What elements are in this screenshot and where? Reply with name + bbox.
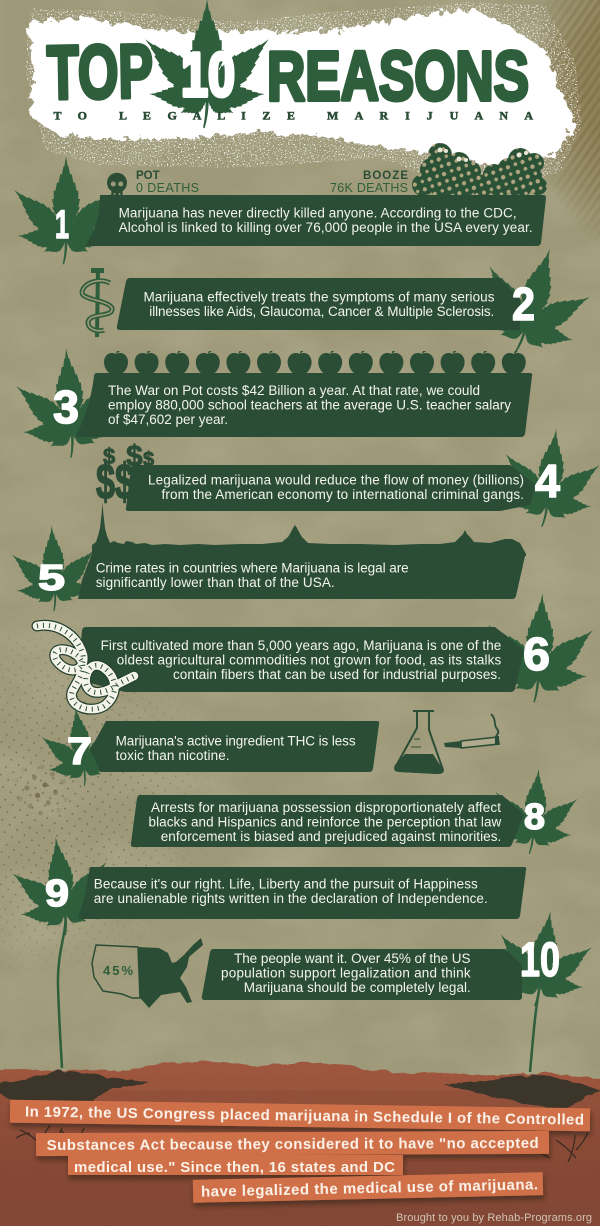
panel: reason 8 [131,765,586,859]
icon: flask [394,711,443,774]
icon: leaf 4 [490,422,600,534]
text 3 [108,383,511,427]
bar 4 [126,465,536,511]
panel: reason 1 [6,143,547,265]
title [46,0,533,128]
bar 2 [117,278,520,330]
strip 4: have legalized the medical use of marijuana. [201,1176,538,1201]
icon: dollar signs: $$ [96,454,134,510]
bar 6 [78,627,524,692]
booze deaths label: 76K DEATHS [330,181,408,195]
bar 1 [85,195,546,246]
text 2 [144,290,495,319]
icon: leaf 5 [4,523,103,614]
bar 3 [75,373,532,437]
text 10: population support legalization and think [221,966,471,980]
icon: leaf 9 [1,830,122,942]
text 4: Legalized marijuana would reduce the flow of money (billions) [148,472,524,488]
strip 2: Substances Act because they considered it to have "no accepted [47,1135,539,1154]
panel: reason 4 [96,422,600,534]
text 8: blacks and Hispanics and reinforce the perception that law [148,814,502,830]
icon: caduceus [82,268,112,337]
text 9: are unalienable rights written in the declaration of Independence. [94,891,488,906]
callout: Schedule I history [10,1100,590,1203]
number 7: 7 [67,731,92,773]
text 1: Marijuana has never directly killed anyone. According to the CDC, [119,206,517,220]
bar 8 [131,795,524,847]
strip 1: In 1972, the US Congress placed marijuana in Schedule I of the Controlled [25,1103,584,1129]
bar 5 [78,553,525,599]
text 4 [148,472,524,502]
subtitle: L E G A L I Z E [119,108,295,122]
plant roots and dark mounds [0,1071,600,1162]
text 6: oldest agricultural commodities not grown for food, as its stalks [117,652,502,668]
subtitle: T O [54,108,87,122]
icon: title leaf [135,0,279,128]
icon: leaf 10 [484,904,600,1014]
text 8: Arrests for marijuana possession disproportionately affect [151,800,501,815]
number 2: 2 [512,278,535,330]
text 4: from the American economy to international criminal gangs. [162,487,524,502]
halftone dots [0,631,211,970]
panel: reason 9 [1,830,526,1068]
text 10: The people want it. Over 45% of the US [234,951,470,966]
credit line: Brought to you by Rehab-Programs.org [396,1212,592,1224]
text 2: illnesses like Aids, Glaucoma, Cancer & Multiple Sclerosis. [149,304,494,319]
text 10: Marijuana should be completely legal. [244,980,471,995]
icon: cigarette [444,714,499,748]
text 3: of $47,602 per year. [108,412,228,427]
panel: reason 7 [32,701,499,792]
text 3: The War on Pot costs $42 Billion a year. At that rate, we could [108,383,480,398]
text 1: Alcohol is linked to killing over 76,000 people in the USA every year. [119,220,533,235]
heading: Top 10 Reasons: TOP [46,29,154,116]
pot deaths label [136,170,199,195]
icon: city skyline [92,503,526,556]
subtitle: M A R I J U A N A [327,108,533,122]
icon: leaf 7 [32,701,130,792]
text 5: Crime rates in countries where Marijuana is legal are [96,560,409,576]
icon: dollar signs: $ [126,440,143,473]
panel: reason 6 [37,590,600,709]
icon: rope knot [37,625,134,709]
number 4: 4 [535,455,560,507]
icon: leaf 2 [460,231,600,372]
icon: right stem [530,985,540,1072]
pot deaths label: 0 DEATHS [136,181,199,195]
panel: reason 5 [4,503,526,614]
text 7: Marijuana's active ingredient THC is less [116,734,356,748]
booze deaths label [330,170,408,195]
icon: leaf 3 [6,344,134,462]
icon: left stem [58,913,66,1068]
text 7: toxic than nicotine. [116,748,230,763]
text 1 [119,206,533,235]
icon: dollar signs: $ [143,449,154,471]
text 5 [96,560,409,590]
number 10: 10 [520,934,560,987]
text 6: contain fibers that can be used for industrial purposes. [173,667,501,682]
heading: Top 10 Reasons: 10 [181,41,235,110]
icon: US map [92,938,203,1008]
number 5: 5 [38,557,65,598]
icon: skull pile [412,143,547,199]
number 3: 3 [53,381,79,433]
icon: leaf 8 [484,765,586,859]
icon: leaf 1 [6,156,126,265]
number 6: 6 [523,628,550,680]
text 9 [94,876,488,906]
text 8 [148,800,502,844]
text 2: Marijuana effectively treats the symptoms of many serious [144,290,495,304]
white paint splat [25,2,582,195]
panel: reason 10 [92,904,600,1072]
bar 9 [78,867,526,919]
heading: Top 10 Reasons [46,29,529,116]
number 9: 9 [45,873,69,915]
icon: US map: 45% [103,963,133,978]
text 5: significantly lower than that of the USA. [96,575,335,590]
pot deaths label: POT [136,170,160,182]
text 6 [101,638,502,682]
text 10 [221,951,471,995]
strip 3: medical use." Since then, 16 states and DC [74,1159,395,1176]
icon: apples [104,351,526,374]
bar 7 [90,721,379,772]
icon: dollar signs: $ [103,444,115,469]
text 3: employ 880,000 school teachers at the average U.S. teacher salary [108,398,511,412]
text 7 [116,734,356,763]
panel: reason 3 [6,344,532,462]
booze deaths label: BOOZE [363,170,408,182]
number 8: 8 [524,796,545,837]
icon: pot skull [107,173,127,196]
icon: leaf 6 [476,590,600,706]
soil ground [0,1061,600,1226]
number 1: 1 [55,203,69,247]
panel: reason 2 [82,231,600,372]
bar 10 [202,949,522,1000]
subtitle [54,108,533,122]
text 8: enforcement is biased and prejudiced against minorities. [161,829,501,844]
text 9: Because it's our right. Life, Liberty and the pursuit of Happiness [94,876,478,892]
text 6: First cultivated more than 5,000 years ago, Marijuana is one of the [101,638,501,653]
